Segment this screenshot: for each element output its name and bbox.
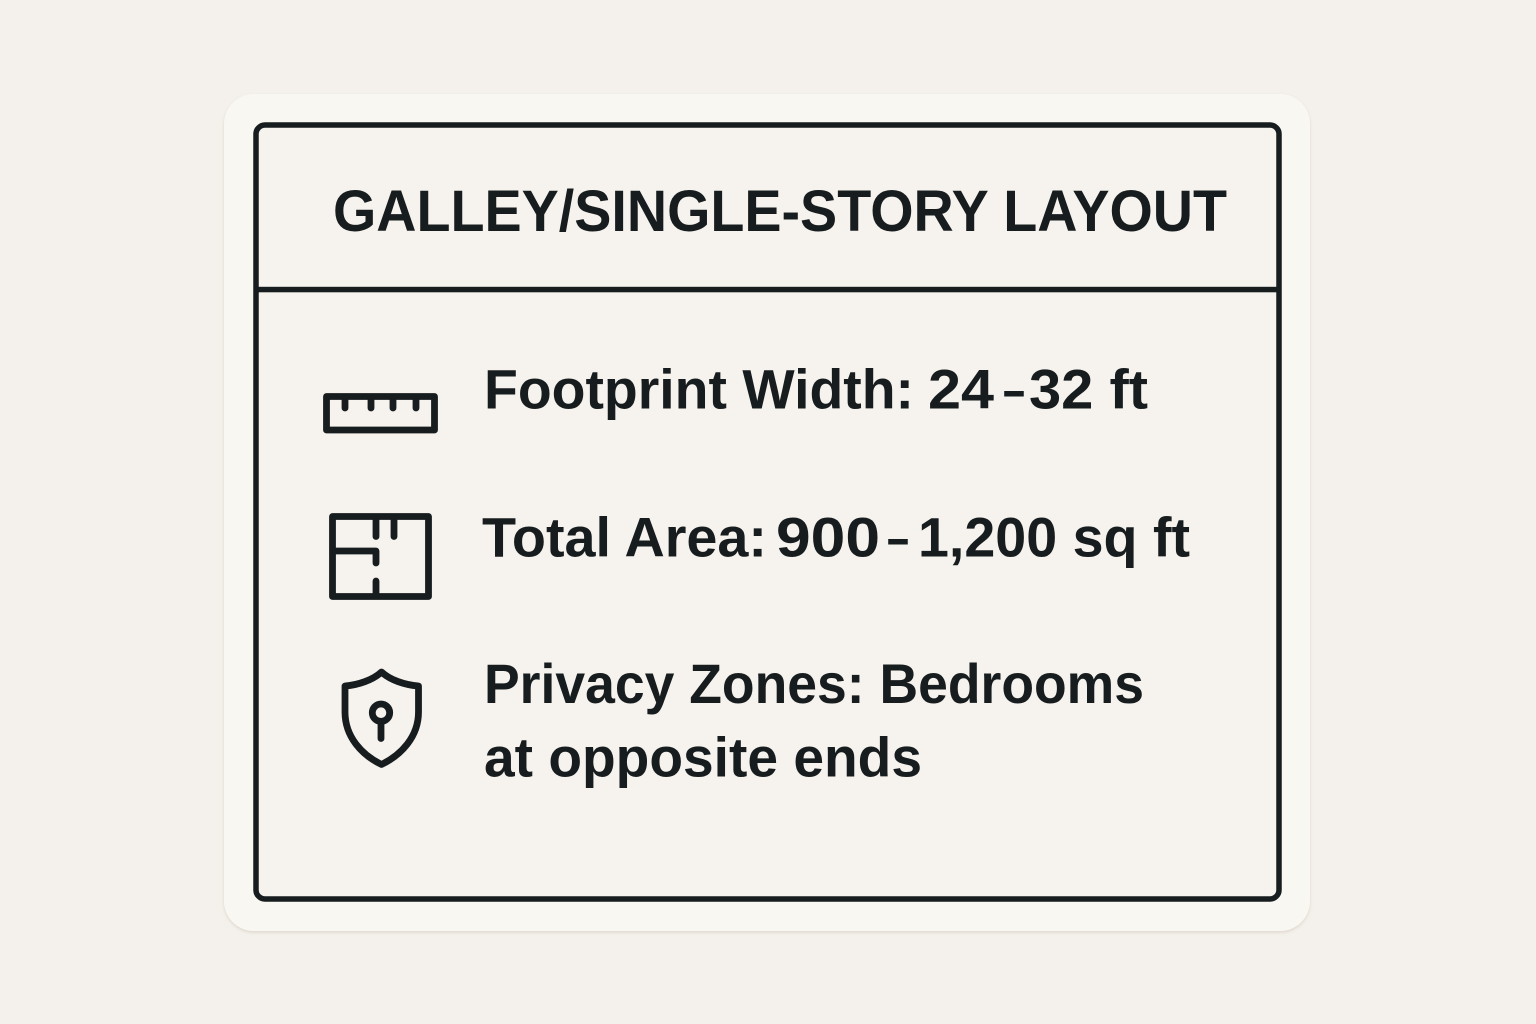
heading divider	[256, 287, 1279, 292]
text: footprint width: 32 ft	[1029, 358, 1148, 420]
panel: card	[224, 94, 1310, 931]
text: footprint width: –	[1003, 358, 1025, 420]
text: total area: –	[887, 506, 909, 568]
text: footprint width	[484, 358, 1148, 420]
text: footprint width: Footprint Width:	[484, 358, 914, 420]
text: total area: 900	[776, 506, 880, 568]
title: GALLEY/SINGLE-STORY LAYOUT	[333, 179, 1227, 244]
text: footprint width: 24	[928, 358, 994, 420]
icon: ruler	[326, 396, 434, 430]
text: privacy zones	[484, 652, 1144, 788]
text: total area	[482, 506, 1190, 568]
text: total area: Total Area:	[482, 506, 767, 568]
icon: shield with keyhole	[345, 672, 418, 764]
text: privacy zones: Privacy Zones: Bedrooms	[484, 652, 1144, 715]
text: privacy zones: at opposite ends	[484, 726, 922, 788]
text: total area: 1,200 sq ft	[918, 506, 1190, 568]
icon: floor plan	[332, 516, 428, 596]
panel: inner frame	[256, 125, 1279, 899]
